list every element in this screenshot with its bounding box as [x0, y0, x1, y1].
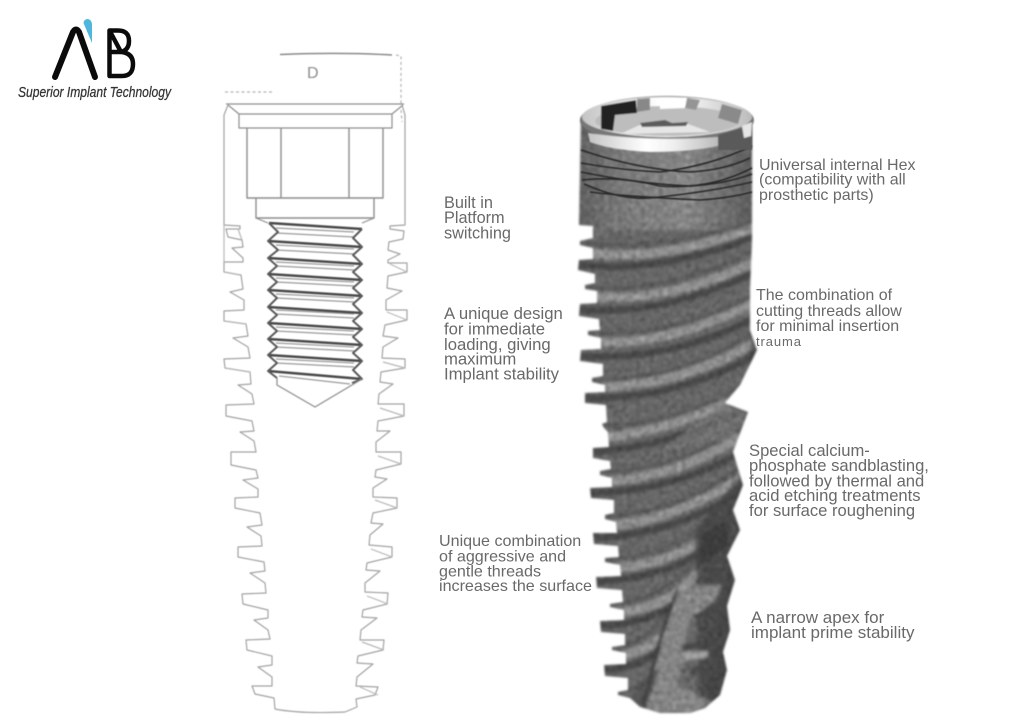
label: surface roughening: acid etching treatments — [749, 486, 921, 505]
logo tagline: Superior Implant Technology — [18, 84, 172, 101]
label: aggressive and gentle threads: increases the surface — [439, 577, 592, 595]
internal screw thread — [268, 223, 362, 407]
dark thread bands — [578, 236, 760, 670]
label: built in platform switching: Built in — [444, 194, 493, 212]
logo letter B — [110, 30, 133, 76]
right rim notch — [718, 120, 752, 150]
label: aggressive and gentle threads: gentle threads — [439, 562, 541, 580]
small thread fins — [580, 222, 752, 693]
label: surface roughening: Special calcium- — [749, 441, 870, 460]
top rim dark segment — [601, 100, 637, 131]
upper flank at notch — [668, 404, 747, 448]
logo: AB Superior Implant Technology — [18, 19, 172, 101]
apex cutting flute — [643, 585, 722, 714]
light thread flanks — [590, 228, 760, 655]
label: cutting threads: trauma — [756, 334, 802, 349]
label: surface roughening: followed by thermal and — [749, 472, 924, 490]
label: universal internal hex: Universal internal Hex — [759, 157, 916, 174]
photo: textured titanium implant — [570, 90, 765, 720]
label: aggressive and gentle threads: of aggressive and — [439, 548, 566, 566]
label: immediate loading design: Implant stability — [444, 364, 560, 384]
label: built in platform switching: switching — [444, 224, 511, 242]
label: aggressive and gentle threads: Unique combination — [439, 532, 581, 550]
front white ring — [588, 133, 718, 152]
label: immediate loading design: loading, giving — [444, 335, 551, 354]
implant right outer wall with threads — [345, 105, 407, 712]
label: universal internal hex: prosthetic parts) — [759, 187, 874, 204]
logo letter A — [55, 30, 95, 77]
implant threaded body with rough surface — [576, 118, 758, 714]
implant left outer wall with threads — [224, 105, 345, 713]
technical drawing: implant cross-section — [224, 53, 407, 713]
implant top rim — [580, 96, 754, 152]
label: immediate loading design: for immediate — [444, 320, 545, 338]
implant head and hex socket — [226, 104, 404, 223]
label: surface roughening: phosphate sandblasting, — [749, 456, 929, 475]
label: narrow apex: A narrow apex for — [751, 608, 884, 627]
label: cutting threads: cutting threads allow — [756, 303, 902, 320]
label: narrow apex: implant prime stability — [751, 623, 915, 642]
hex socket floor — [620, 124, 710, 134]
top rim bright segment — [660, 98, 687, 109]
dimension marker D: D — [307, 65, 319, 82]
label: surface roughening: for surface roughening — [749, 501, 915, 520]
logo blue drop — [84, 19, 92, 43]
dimension marker D — [225, 53, 402, 122]
label: cutting threads: The combination of — [756, 287, 892, 304]
label: universal internal hex: (compatibility with all — [759, 172, 906, 188]
collar engraved wires — [581, 146, 752, 200]
label: cutting threads: for minimal insertion — [756, 318, 899, 335]
label: built in platform switching: Platform — [444, 209, 505, 227]
right side shaded flute — [744, 336, 757, 418]
label: immediate loading design: maximum — [444, 350, 516, 368]
label: immediate loading design: A unique design — [444, 304, 563, 323]
